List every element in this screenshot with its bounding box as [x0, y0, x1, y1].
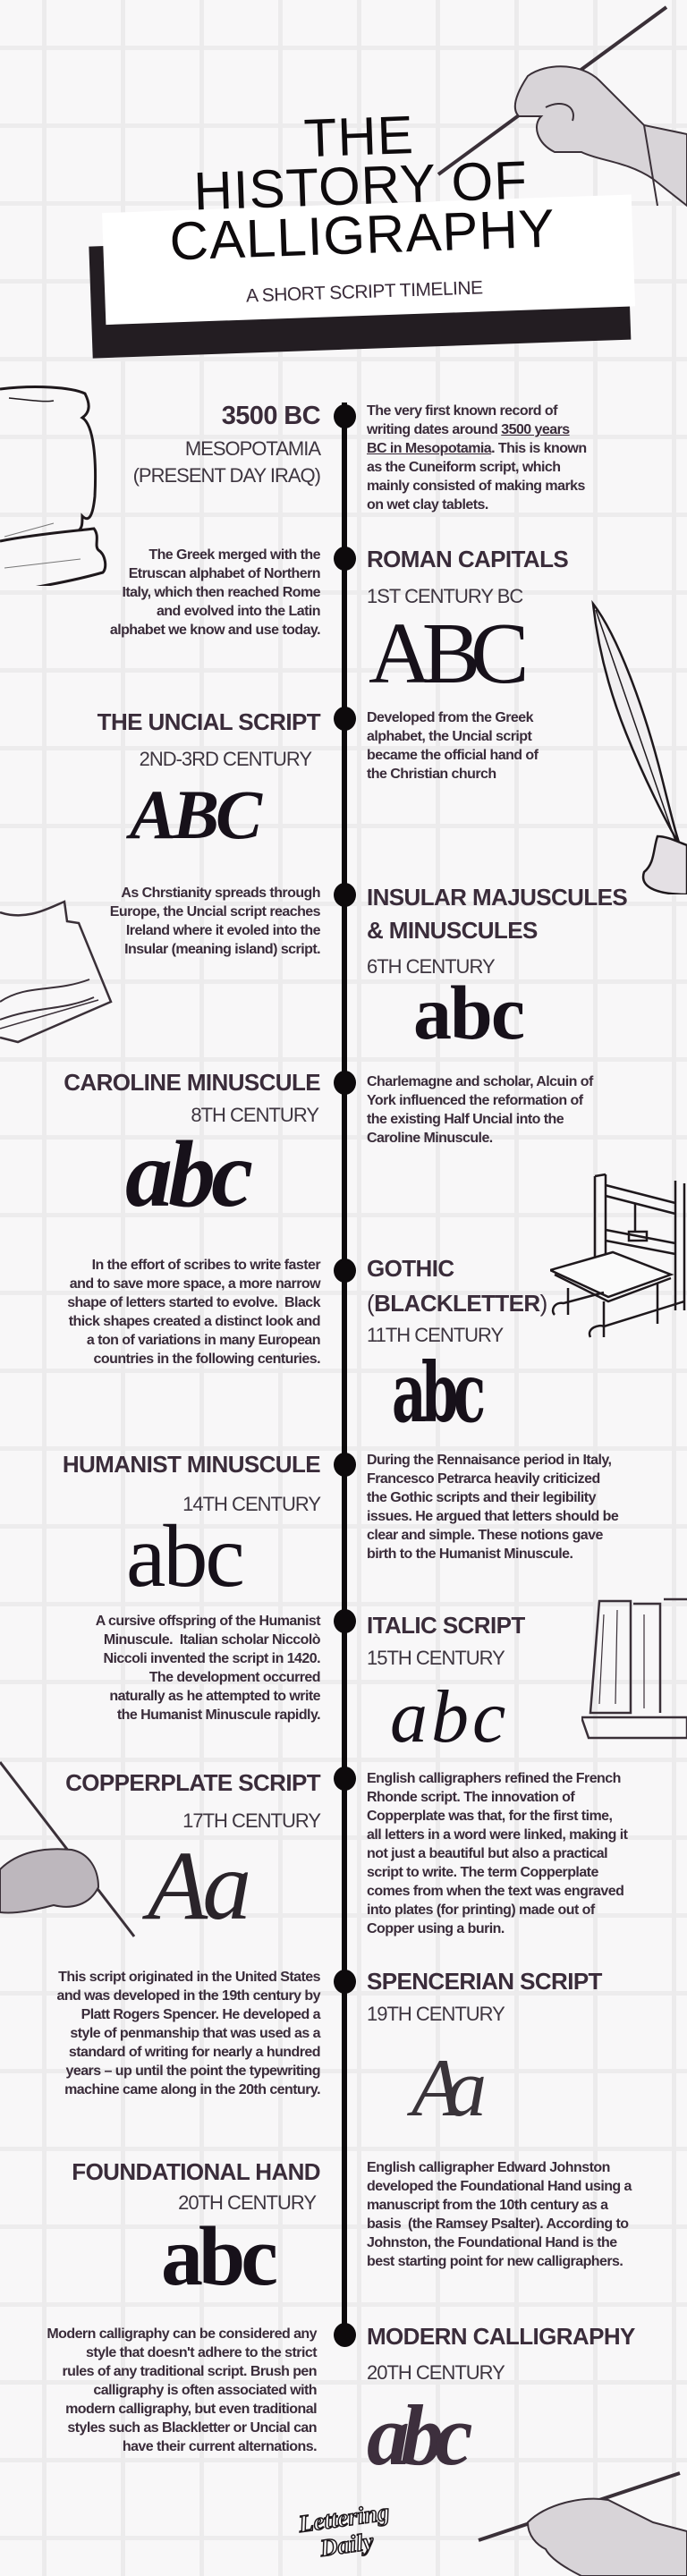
entry: gothic [67, 1255, 547, 1441]
description: into plates (for printing) made out of [367, 1902, 595, 1918]
dot [334, 1767, 356, 1791]
description: rules of any traditional script. Brush pen [62, 2364, 317, 2379]
subheading: 17TH CENTURY [182, 1809, 320, 1832]
logo: Lettering [297, 2498, 391, 2538]
description: mainly consisted of making marks [367, 479, 585, 494]
subheading: MESOPOTAMIA [185, 437, 320, 460]
description: Europe, the Uncial script reaches [110, 904, 320, 919]
entry: insular [110, 883, 627, 1055]
description: As Chrstianity spreads through [121, 886, 320, 901]
heading: 3500 BC [222, 402, 320, 430]
description [367, 403, 587, 513]
entry: roman capitals [110, 546, 568, 702]
dot [334, 1258, 356, 1283]
heading: HUMANIST MINUSCULE [63, 1451, 320, 1478]
heading: GOTHIC [367, 1255, 454, 1282]
description [367, 1453, 619, 1562]
description [96, 1614, 320, 1723]
description: Insular (meaning island) script. [124, 942, 320, 957]
dot [334, 404, 356, 428]
title text: HISTORY OF [192, 150, 529, 222]
description: have their current alternations. [123, 2439, 317, 2454]
entry: spencerian [56, 1968, 603, 2133]
description: Developed from the Greek [367, 710, 533, 725]
description: a ton of variations in many European [87, 1333, 320, 1348]
heading: & MINUSCULES [367, 917, 538, 944]
heading [367, 884, 627, 944]
description: Copper using a burin. [367, 1921, 505, 1936]
illustration: quill and inkwell [591, 599, 687, 894]
dot [334, 883, 356, 907]
description: developed the Foundational Hand using a [367, 2179, 632, 2194]
subheading: 20TH CENTURY [367, 2361, 505, 2384]
description: The Greek merged with the [148, 547, 320, 563]
sample letters: abc [161, 2210, 274, 2303]
description: alphabet, the Uncial script [367, 729, 531, 744]
heading: MODERN CALLIGRAPHY [367, 2323, 635, 2350]
dot [334, 2323, 356, 2347]
subheading: 14TH CENTURY [182, 1493, 320, 1515]
entry: foundational [72, 2158, 632, 2303]
description: issues. He argued that letters should be [367, 1509, 618, 1524]
entry: uncial [97, 707, 539, 853]
description: Modern calligraphy can be considered any [47, 2326, 317, 2342]
sample letters: abc [126, 1506, 242, 1606]
heading: (BLACKLETTER) [367, 1290, 547, 1317]
heading: ITALIC SCRIPT [367, 1612, 525, 1639]
heading: COPPERPLATE SCRIPT [65, 1769, 320, 1796]
description: A cursive offspring of the Humanist [96, 1614, 320, 1629]
subheading: 2ND-3RD CENTURY [140, 748, 311, 770]
title text: CALLIGRAPHY [168, 198, 556, 272]
sample letters: abc [392, 1344, 480, 1441]
description: Etruscan alphabet of Northern [129, 566, 320, 581]
description: York influenced the reformation of [367, 1093, 582, 1108]
description: became the official hand of [367, 748, 538, 763]
description: writing dates around 3500 years [367, 422, 570, 437]
sample letters: Aa [411, 2042, 471, 2133]
subheading: 8TH CENTURY [191, 1104, 318, 1126]
description: thick shapes created a distinct look and [69, 1314, 320, 1329]
illustration: scroll [0, 386, 107, 586]
description [110, 547, 320, 638]
sample letters: ABC [130, 775, 259, 853]
description [67, 1258, 321, 1367]
heading: INSULAR MAJUSCULES [367, 884, 627, 911]
sample letters: abc [125, 1122, 249, 1226]
description: basis (the Ramsey Psalter). According to [367, 2216, 629, 2232]
description: birth to the Humanist Minuscule. [367, 1546, 572, 1562]
illustration: hand with pen bottom right [478, 2471, 687, 2576]
description: the Gothic scripts and their legibility [367, 1490, 596, 1505]
description: Ireland where it evoled into the [126, 923, 320, 938]
title text [168, 105, 556, 272]
dot [334, 1453, 356, 1477]
dot [334, 707, 356, 731]
description: years – up until the point the typewriting [66, 2063, 320, 2079]
illustration: books [581, 1597, 687, 1739]
description: Italy, which then reached Rome [122, 585, 320, 600]
description: and evolved into the Latin [157, 604, 320, 619]
description: modern calligraphy, but even traditional [65, 2402, 317, 2417]
description: and to save more space, a more narrow [70, 1276, 320, 1292]
dot [334, 1970, 356, 1994]
subheading: 20TH CENTURY [178, 2191, 316, 2214]
heading: FOUNDATIONAL HAND [72, 2158, 320, 2185]
subheading: 19TH CENTURY [367, 2003, 505, 2025]
title shadow box [89, 228, 631, 359]
description: English calligrapher Edward Johnston [367, 2160, 610, 2175]
description: Minuscule. Italian scholar Niccolò [104, 1632, 320, 1648]
heading: ROMAN CAPITALS [367, 546, 568, 572]
description: In the effort of scribes to write faster [92, 1258, 320, 1273]
illustration: hand with quill left [0, 1761, 136, 1937]
description: script to write. The term Copperplate [367, 1865, 598, 1880]
entry: italic [96, 1609, 525, 1758]
description: standard of writing for nearly a hundred [69, 2045, 320, 2060]
description [47, 2326, 317, 2454]
logo: Daily [318, 2528, 375, 2562]
description: style that doesn't adhere to the strict [86, 2345, 317, 2360]
illustration: printing press [550, 1174, 685, 1338]
description: Johnston, the Foundational Hand is the [367, 2235, 617, 2250]
description: all letters in a word were linked, making it [367, 1827, 627, 1843]
description: English calligraphers refined the French [367, 1771, 621, 1786]
description: Charlemagne and scholar, Alcuin of [367, 1074, 593, 1089]
sample letters: abc [413, 970, 523, 1055]
subtitle: A SHORT SCRIPT TIMELINE [246, 277, 483, 307]
description: Rhonde script. The innovation of [367, 1790, 574, 1805]
dot [334, 1071, 356, 1095]
description: and was developed in the 19th century by [56, 1988, 320, 2004]
description: countries in the following centuries. [94, 1352, 320, 1367]
description: the existing Half Uncial into the [367, 1112, 564, 1127]
description: styles such as Blackletter or Uncial can [67, 2420, 317, 2436]
description: manuscript from the 10th century as a [367, 2198, 608, 2213]
description: on wet clay tablets. [367, 497, 488, 513]
description: the Humanist Minuscule rapidly. [117, 1707, 320, 1723]
heading: THE UNCIAL SCRIPT [98, 708, 320, 735]
heading: SPENCERIAN SCRIPT [367, 1968, 602, 1995]
description: not just a beautiful but also a practical [367, 1846, 607, 1861]
subheading: 11TH CENTURY [367, 1324, 503, 1346]
description: Caroline Minuscule. [367, 1131, 493, 1146]
description: Platt Rogers Spencer. He developed a [81, 2007, 320, 2022]
title block [89, 105, 634, 359]
description [367, 2160, 632, 2269]
description [110, 886, 320, 957]
dot [334, 547, 356, 571]
subheading: 15TH CENTURY [367, 1647, 505, 1669]
subheading [133, 437, 321, 487]
sample letters: Aa [148, 1831, 246, 1940]
title white box [102, 194, 635, 325]
description: This script originated in the United States [58, 1970, 320, 1985]
description [367, 710, 539, 782]
subheading: 6TH CENTURY [367, 955, 495, 978]
sample letters: ABC [369, 606, 520, 702]
description [367, 1074, 594, 1146]
description: BC in Mesopotamia. This is known [367, 441, 587, 456]
description [56, 1970, 321, 2097]
description: as the Cuneiform script, which [367, 460, 560, 475]
description: machine came along in the 20th century. [64, 2082, 320, 2097]
description: Niccoli invented the script in 1420. [103, 1651, 320, 1666]
description: During the Rennaisance period in Italy, [367, 1453, 611, 1468]
description: the Christian church [367, 767, 496, 782]
description: shape of letters started to evolve. Black [67, 1295, 320, 1310]
description: clear and simple. These notions gave [367, 1528, 603, 1543]
subheading: 1ST CENTURY BC [367, 585, 522, 607]
dot [334, 1609, 356, 1633]
description: naturally as he attempted to write [109, 1689, 320, 1704]
entry: copperplate [65, 1767, 628, 1940]
description: The very first known record of [367, 403, 557, 419]
entry: modern [47, 2323, 635, 2483]
description: Francesco Petrarca heavily criticized [367, 1471, 600, 1487]
description: style of penmanship that was used as a [70, 2026, 320, 2041]
logo [297, 2498, 391, 2562]
title text: THE [303, 105, 415, 168]
subheading: (PRESENT DAY IRAQ) [133, 464, 320, 487]
description: Copperplate was that, for the first time, [367, 1809, 612, 1824]
description: best starting point for new calligraphers. [367, 2254, 623, 2269]
entry: caroline [64, 1069, 594, 1226]
heading [367, 1255, 547, 1317]
illustration: book [0, 900, 113, 1043]
description: comes from when the text was engraved [367, 1884, 623, 1899]
sample letters: abc [367, 2387, 464, 2483]
description: alphabet we know and use today. [110, 623, 320, 638]
description [367, 1771, 628, 1936]
description: The development occurred [149, 1670, 320, 1685]
heading: CAROLINE MINUSCULE [64, 1069, 320, 1096]
sample letters: abc [390, 1675, 509, 1758]
description: calligraphy is often associated with [93, 2383, 317, 2398]
timeline line [342, 402, 347, 2334]
entry: humanist [63, 1451, 619, 1606]
illustration: hand with pen top right [437, 5, 687, 208]
entry: 3500 BC [133, 402, 587, 513]
